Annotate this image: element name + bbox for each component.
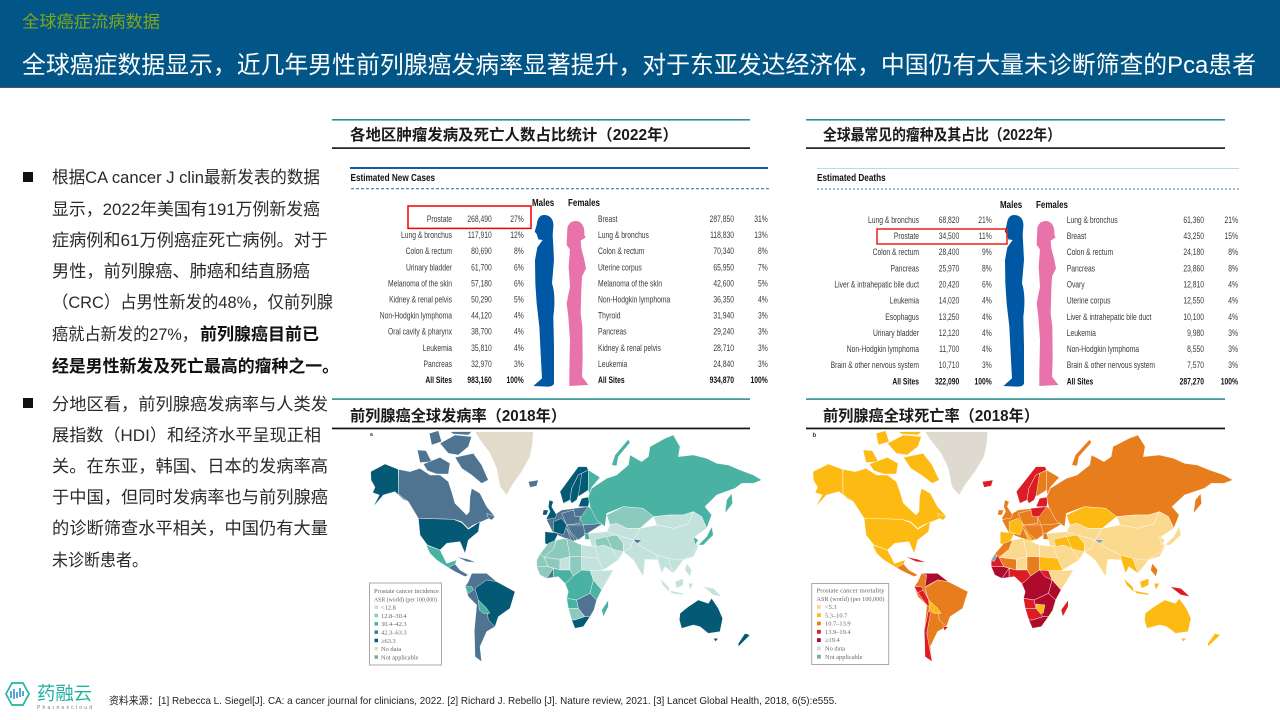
male counts: 11,700 bbox=[939, 344, 960, 354]
heading: incidence map: 前列腺癌全球发病率（2018年） bbox=[350, 406, 566, 425]
callout: prostate highlight bbox=[408, 206, 531, 228]
female counts: 12,810 bbox=[1183, 280, 1204, 290]
female percentages: 8% bbox=[1228, 247, 1238, 257]
male percentages bbox=[506, 214, 524, 385]
female counts: 65,950 bbox=[713, 262, 734, 273]
female percentages: 3% bbox=[758, 311, 768, 321]
icon: male and female silhouettes bbox=[1003, 215, 1058, 387]
female organ names: Colon & rectum bbox=[598, 246, 645, 256]
heading: mortality map: 前列腺癌全球死亡率（2018年） bbox=[823, 406, 1039, 425]
male counts bbox=[935, 215, 960, 387]
male organ names: Liver & intrahepatic bile duct bbox=[834, 280, 920, 290]
text block: bullet one bbox=[23, 168, 339, 376]
male organ names: Prostate bbox=[427, 214, 452, 224]
male organ names: Lung & bronchus bbox=[868, 215, 919, 225]
female counts: 9,980 bbox=[1187, 328, 1204, 338]
male counts: 32,970 bbox=[471, 359, 492, 369]
female percentages: 15% bbox=[1225, 231, 1238, 241]
female percentages: 7% bbox=[758, 262, 768, 273]
female counts: 36,350 bbox=[713, 295, 734, 305]
male percentages: 4% bbox=[982, 312, 992, 322]
male percentages: 4% bbox=[982, 296, 992, 306]
male percentages: 6% bbox=[514, 278, 524, 289]
male organ names: Brain & other nervous system bbox=[831, 360, 919, 370]
female counts: 70,340 bbox=[713, 246, 734, 256]
table: estimated new cases: Males bbox=[532, 197, 554, 208]
tagline: Pharnexcloud bbox=[37, 705, 92, 711]
male organ names: Non-Hodgkin lymphoma bbox=[847, 344, 919, 354]
female organ names: Leukemia bbox=[598, 359, 628, 369]
male percentages: 6% bbox=[514, 262, 524, 273]
female organ names: Pancreas bbox=[1067, 263, 1095, 274]
main title: 全球癌症数据显示，近几年男性前列腺癌发病率显著提升，对于东亚发达经济体，中国仍有大量未诊断筛查的Pca患者 bbox=[22, 52, 1256, 79]
male percentages: 12% bbox=[510, 230, 524, 240]
female counts: 42,600 bbox=[713, 278, 734, 289]
female organ names: Brain & other nervous system bbox=[1067, 360, 1155, 370]
text block: bullet two: 未诊断患者。 bbox=[52, 551, 148, 570]
male percentages: 6% bbox=[982, 280, 992, 290]
female organ names: Breast bbox=[598, 214, 618, 224]
male organ names bbox=[380, 214, 452, 385]
female organ names: Non-Hodgkin lymphoma bbox=[598, 295, 671, 305]
legend: incidence: 30.4–42.3 bbox=[381, 621, 407, 628]
female counts bbox=[1180, 215, 1204, 387]
male percentages: 100% bbox=[974, 376, 992, 387]
wordmark: 药融云 bbox=[37, 683, 92, 704]
female percentages: 31% bbox=[754, 214, 768, 224]
female counts: 61,360 bbox=[1183, 215, 1204, 225]
female counts: 934,870 bbox=[710, 375, 734, 385]
heading: common cancers: 全球最常见的瘤种及其占比（2022年） bbox=[823, 125, 1061, 144]
table: estimated deaths: Males bbox=[1000, 199, 1022, 210]
text block: bullet one: 根据CA cancer J clin最新发表的数据 bbox=[52, 168, 320, 187]
female organ names: Lung & bronchus bbox=[1067, 215, 1118, 225]
male organ names: Lung & bronchus bbox=[401, 230, 452, 240]
table: estimated new cases bbox=[350, 167, 769, 387]
male organ names: Colon & rectum bbox=[406, 246, 452, 256]
female counts: 28,710 bbox=[713, 343, 734, 353]
female percentages bbox=[1221, 215, 1238, 387]
male percentages: 4% bbox=[514, 343, 524, 353]
female percentages: 13% bbox=[754, 230, 768, 240]
female counts: 24,180 bbox=[1183, 247, 1204, 257]
male counts: 35,810 bbox=[471, 343, 492, 353]
text block: bullet two: 分地区看，前列腺癌发病率与人类发 bbox=[52, 395, 328, 414]
text block: bullet two: 关。在东亚，韩国、日本的发病率高 bbox=[52, 457, 328, 476]
text block: bullet two bbox=[23, 395, 328, 570]
male organ names: Urinary bladder bbox=[406, 262, 452, 273]
legend: mortality: ASR (world) (per 100,000) bbox=[816, 596, 884, 603]
female organ names bbox=[598, 214, 671, 385]
male counts: 10,710 bbox=[939, 360, 960, 370]
text block: bullet two: 的诊断筛查水平相关，中国仍有大量 bbox=[52, 519, 328, 538]
male counts: 268,490 bbox=[467, 214, 492, 224]
female percentages: 8% bbox=[1228, 263, 1238, 274]
male counts bbox=[467, 214, 492, 385]
male percentages: 27% bbox=[510, 214, 524, 224]
legend: incidence: ASR (world) (per 100,000) bbox=[374, 596, 437, 603]
male percentages: 100% bbox=[506, 375, 524, 385]
text block: bullet one: 前列腺癌目前已 bbox=[200, 324, 319, 344]
female percentages: 4% bbox=[758, 295, 768, 305]
male percentages: 4% bbox=[982, 344, 992, 354]
male counts: 61,700 bbox=[471, 262, 492, 273]
male organ names: Melanoma of the skin bbox=[388, 278, 452, 289]
female organ names: Uterine corpus bbox=[598, 262, 642, 273]
legend: mortality: <5.3 bbox=[825, 604, 837, 611]
male counts: 983,160 bbox=[467, 375, 492, 385]
male organ names: Leukemia bbox=[890, 296, 919, 306]
male counts: 117,910 bbox=[468, 230, 492, 240]
table: estimated new cases: Females bbox=[568, 197, 600, 208]
source note: 资料来源：[1] Rebecca L. Siegel[J]. CA: a cancer journal for clinicians, 2022. [2] Richard J. Rebello [J]. Nature review, 2021. [3] Lancet Global Health, 2018, 6(5):e555. bbox=[109, 694, 837, 707]
male organ names: All Sites bbox=[425, 375, 452, 385]
female organ names: Colon & rectum bbox=[1067, 247, 1113, 257]
logo bbox=[6, 683, 92, 711]
female counts: 31,940 bbox=[713, 311, 734, 321]
panel tag b: b bbox=[812, 433, 816, 439]
female organ names: Pancreas bbox=[598, 327, 626, 337]
male percentages: 8% bbox=[514, 246, 524, 256]
female percentages: 5% bbox=[758, 278, 768, 289]
male counts: 322,090 bbox=[935, 376, 960, 387]
female percentages: 100% bbox=[1221, 376, 1238, 387]
panel tag a: a bbox=[370, 432, 373, 438]
legend: mortality: 10.7–13.9 bbox=[825, 621, 851, 628]
male organ names: Urinary bladder bbox=[873, 328, 919, 338]
female percentages: 3% bbox=[1228, 328, 1238, 338]
male organ names: Esophagus bbox=[885, 312, 919, 322]
female organ names: Melanoma of the skin bbox=[598, 278, 662, 289]
female organ names: Thyroid bbox=[598, 311, 620, 321]
female counts: 43,250 bbox=[1183, 231, 1204, 241]
male counts: 14,020 bbox=[939, 296, 960, 306]
male counts: 50,290 bbox=[471, 295, 492, 305]
female percentages: 8% bbox=[758, 246, 768, 256]
icon: hexagon with bars bbox=[6, 683, 29, 705]
female organ names: Kidney & renal pelvis bbox=[598, 343, 661, 353]
male organ names: Oral cavity & pharynx bbox=[388, 327, 452, 337]
female counts: 24,840 bbox=[713, 359, 734, 369]
male counts: 12,120 bbox=[939, 328, 960, 338]
male counts: 68,820 bbox=[939, 215, 960, 225]
text block: bullet two: 展指数（HDI）和经济水平呈现正相 bbox=[52, 426, 321, 445]
female counts: 287,270 bbox=[1180, 376, 1204, 387]
male organ names: Kidney & renal pelvis bbox=[389, 295, 452, 305]
male counts: 34,500 bbox=[939, 231, 960, 241]
female percentages: 3% bbox=[1228, 344, 1238, 354]
female organ names: All Sites bbox=[1067, 376, 1094, 387]
male counts: 13,250 bbox=[939, 312, 960, 322]
text block: bullet one: 显示，2022年美国有191万例新发癌 bbox=[52, 200, 320, 219]
male organ names: Colon & rectum bbox=[873, 247, 919, 257]
female counts: 118,830 bbox=[710, 230, 734, 240]
table: estimated deaths: Females bbox=[1036, 199, 1068, 210]
text block: bullet two: 于中国，但同时发病率也与前列腺癌 bbox=[52, 488, 328, 507]
male percentages: 21% bbox=[978, 215, 992, 225]
female organ names: Breast bbox=[1067, 231, 1087, 241]
map: prostate cancer mortality bbox=[813, 431, 1233, 662]
female percentages: 3% bbox=[758, 359, 768, 369]
female counts: 7,570 bbox=[1187, 360, 1204, 370]
legend: incidence: 42.3–63.3 bbox=[381, 630, 407, 636]
female counts bbox=[710, 214, 734, 385]
female organ names: Uterine corpus bbox=[1067, 296, 1111, 306]
callout: prostate highlight bbox=[877, 229, 1007, 244]
legend: incidence bbox=[370, 583, 442, 665]
legend: mortality: 5.3–10.7 bbox=[825, 612, 848, 619]
female organ names: Leukemia bbox=[1067, 328, 1096, 338]
male counts: 20,420 bbox=[939, 280, 960, 290]
map: prostate cancer incidence bbox=[371, 431, 762, 662]
male percentages: 3% bbox=[514, 359, 524, 369]
male counts: 38,700 bbox=[471, 327, 492, 337]
heading: cases by region: 各地区肿瘤发病及死亡人数占比统计（2022年） bbox=[350, 125, 678, 144]
text block: bullet one: 症病例和61万例癌症死亡病例。对于 bbox=[52, 231, 328, 250]
male percentages bbox=[974, 215, 992, 387]
male organ names: All Sites bbox=[892, 376, 919, 387]
legend: incidence: Not applicable bbox=[381, 654, 419, 661]
male counts: 80,690 bbox=[471, 246, 492, 256]
female counts: 10,100 bbox=[1183, 312, 1204, 322]
female organ names: Lung & bronchus bbox=[598, 230, 649, 240]
female percentages: 21% bbox=[1225, 215, 1238, 225]
male percentages: 4% bbox=[982, 328, 992, 338]
text block: bullet one: 经是男性新发及死亡最高的瘤种之一。 bbox=[52, 356, 339, 376]
male percentages: 11% bbox=[979, 231, 992, 241]
male percentages: 5% bbox=[514, 295, 524, 305]
male organ names: Pancreas bbox=[424, 359, 452, 369]
legend: mortality: Prostate cancer mortality bbox=[816, 588, 885, 594]
female percentages bbox=[750, 214, 768, 385]
male percentages: 9% bbox=[982, 247, 992, 257]
female organ names: Liver & intrahepatic bile duct bbox=[1067, 312, 1152, 322]
female organ names bbox=[1067, 215, 1155, 387]
legend: mortality: ≥19.4 bbox=[825, 637, 840, 644]
female percentages: 100% bbox=[750, 375, 768, 385]
female percentages: 4% bbox=[1228, 312, 1238, 322]
text block: bullet one: 男性，前列腺癌、肺癌和结直肠癌 bbox=[52, 262, 310, 281]
female counts: 12,550 bbox=[1183, 296, 1204, 306]
female counts: 29,240 bbox=[713, 327, 734, 337]
legend: incidence: Prostate cancer incidence bbox=[374, 588, 439, 595]
male counts: 25,970 bbox=[939, 263, 960, 274]
female organ names: Non-Hodgkin lymphoma bbox=[1067, 344, 1139, 354]
legend: incidence: No data bbox=[381, 646, 401, 653]
male percentages: 8% bbox=[982, 263, 992, 274]
male counts: 57,180 bbox=[471, 278, 492, 289]
male percentages: 4% bbox=[514, 327, 524, 337]
table: estimated deaths bbox=[817, 168, 1239, 387]
male percentages: 4% bbox=[514, 311, 524, 321]
legend: incidence: 12.8–30.4 bbox=[381, 613, 407, 620]
text block: bullet one: （CRC）占男性新发的48%，仅前列腺 bbox=[52, 293, 333, 312]
female counts: 8,550 bbox=[1187, 344, 1204, 354]
male organ names: Non-Hodgkin lymphoma bbox=[380, 311, 452, 321]
table: estimated deaths: Estimated Deaths bbox=[817, 172, 886, 183]
female counts: 23,860 bbox=[1183, 263, 1204, 274]
female percentages: 4% bbox=[1228, 296, 1238, 306]
female percentages: 3% bbox=[758, 343, 768, 353]
male counts: 28,400 bbox=[939, 247, 960, 257]
section label: 全球癌症流病数据 bbox=[22, 12, 160, 32]
legend: incidence: <12.8 bbox=[381, 605, 396, 612]
female counts: 287,850 bbox=[710, 214, 734, 224]
male organ names: Prostate bbox=[894, 231, 919, 241]
header band bbox=[0, 0, 1280, 88]
male organ names: Leukemia bbox=[423, 343, 452, 353]
female percentages: 3% bbox=[758, 327, 768, 337]
male organ names bbox=[831, 215, 920, 387]
legend: mortality: 13.9–19.4 bbox=[825, 629, 851, 636]
table: estimated new cases: Estimated New Cases bbox=[350, 172, 435, 183]
icon: male and female silhouettes bbox=[533, 215, 588, 387]
legend: incidence: ≥63.3 bbox=[381, 638, 396, 645]
female percentages: 4% bbox=[1228, 280, 1238, 290]
female percentages: 3% bbox=[1228, 360, 1238, 370]
legend: mortality: Not applicable bbox=[825, 654, 863, 661]
legend: mortality bbox=[812, 584, 889, 664]
male percentages: 3% bbox=[982, 360, 992, 370]
text block: bullet one: 癌就占新发的27%， bbox=[52, 325, 198, 344]
female organ names: Ovary bbox=[1067, 280, 1085, 290]
legend: mortality: No data bbox=[825, 646, 845, 652]
male counts: 44,120 bbox=[471, 311, 492, 321]
female organ names: All Sites bbox=[598, 375, 625, 385]
male organ names: Pancreas bbox=[891, 263, 919, 274]
